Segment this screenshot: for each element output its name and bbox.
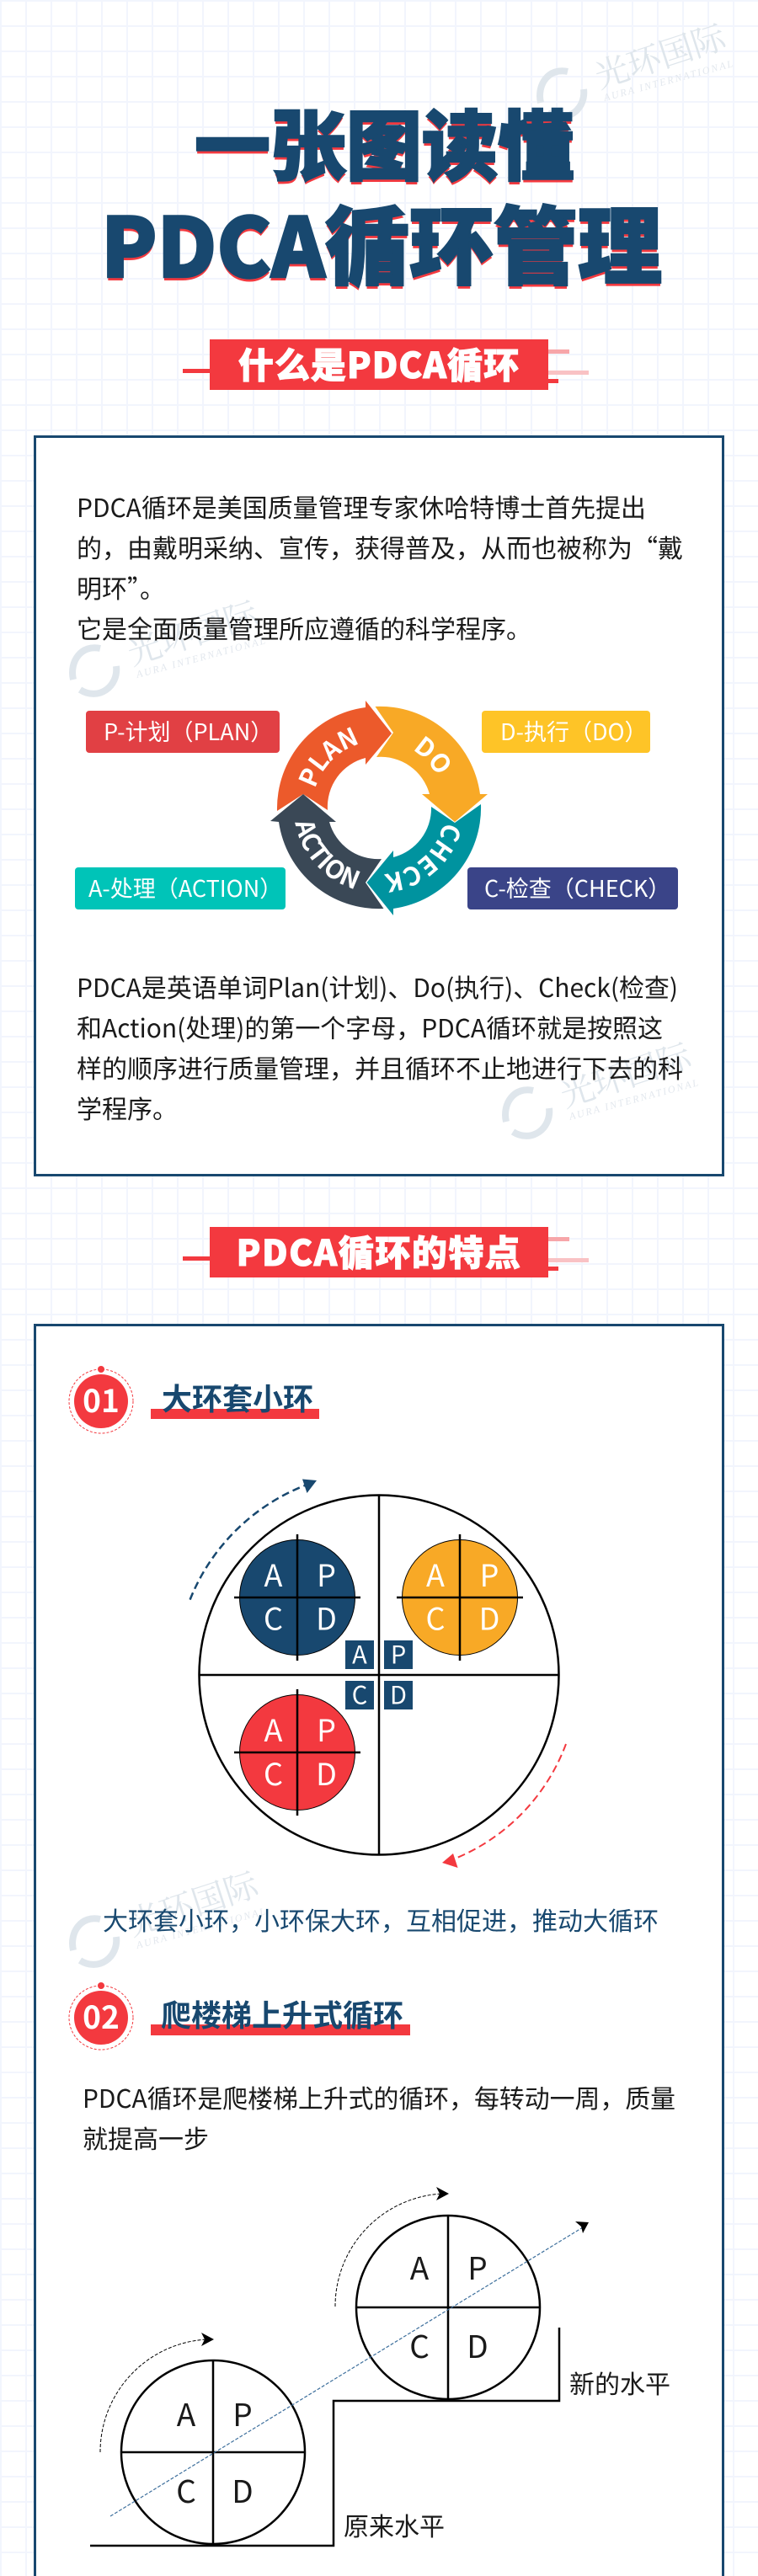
section heading: characteristics: PDCA循环的特点 <box>237 1225 521 1277</box>
section heading: what is PDCA: 什么是PDCA循环 <box>238 338 520 389</box>
watermark: panel two: 光环国际 <box>120 1858 264 1945</box>
small circle: orange: A <box>426 1552 445 1596</box>
centre squares: P <box>391 1635 406 1671</box>
rotation arrow upper <box>335 2187 449 2307</box>
watermark: top <box>536 10 734 118</box>
small circle: red: C <box>264 1751 283 1795</box>
small circle: red <box>234 1689 360 1816</box>
intro text: PDCA循环是美国质量管理专家休哈特博士首先提出 <box>77 488 646 525</box>
watermark: panel one left <box>72 587 267 694</box>
watermark: panel one right: AURA INTERNATIONAL <box>567 1076 700 1123</box>
watermark: panel one left: 光环国际 <box>120 587 264 675</box>
explanation text: 学程序。 <box>77 1089 178 1126</box>
label: check: C-检查（CHECK） <box>484 871 670 904</box>
badge 02 <box>69 1982 133 2050</box>
upper circle: D <box>467 2322 488 2367</box>
PDCA cycle ring: ACTION <box>295 822 360 889</box>
explanation text: 样的顺序进行质量管理，并且循环不止地进行下去的科 <box>77 1048 683 1085</box>
PDCA cycle ring <box>270 701 488 915</box>
badge 02: 02 <box>83 1992 120 2038</box>
watermark: top: 光环国际 <box>588 10 732 98</box>
lower circle: D <box>232 2467 254 2512</box>
intro text: 的，由戴明采纳、宣传，获得普及，从而也被称为“戴 <box>77 528 683 565</box>
label: original level: 原来水平 <box>344 2506 445 2543</box>
label: check <box>467 867 678 909</box>
caption: 大环套小环，小环保大环，互相促进，推动大循环 <box>103 1901 659 1938</box>
PDCA cycle ring: PLAN <box>298 727 358 787</box>
upper circle: P <box>467 2243 488 2289</box>
lower circle: P <box>232 2390 253 2435</box>
panel: characteristics <box>34 1324 724 2576</box>
label: new level: 新的水平 <box>569 2364 670 2401</box>
badge 01 <box>69 1366 133 1433</box>
small circle: red: P <box>317 1707 336 1751</box>
small circle: red: A <box>264 1707 283 1751</box>
label: action: A-处理（ACTION） <box>88 871 282 904</box>
subheading 02: 爬楼梯上升式循环 <box>161 1992 403 2035</box>
small circle: orange: C <box>426 1595 445 1639</box>
lower circle: C <box>176 2467 196 2512</box>
intro text: 它是全面质量管理所应遵循的科学程序。 <box>77 609 531 646</box>
small circle: navy <box>234 1534 360 1661</box>
intro text <box>77 488 683 646</box>
small circle: orange <box>397 1534 523 1661</box>
staircase text: PDCA循环是爬楼梯上升式的循环，每转动一周，质量 <box>83 2078 675 2115</box>
centre squares: A <box>352 1635 367 1671</box>
staircase diagram <box>90 2187 670 2546</box>
label: plan: P-计划（PLAN） <box>104 714 273 747</box>
watermark: top: AURA INTERNATIONAL <box>601 57 734 104</box>
centre squares: C <box>352 1676 367 1711</box>
upper circle <box>356 2216 540 2399</box>
subheading 01: 大环套小环 <box>162 1375 313 1419</box>
label: do <box>482 711 650 753</box>
upper circle: C <box>409 2322 430 2367</box>
watermark: panel one right <box>505 1029 700 1136</box>
staircase text: 就提高一步 <box>83 2119 209 2156</box>
small circle: navy: P <box>317 1552 336 1596</box>
title line 1: 一张图读懂 <box>195 86 574 195</box>
PDCA cycle ring: DO <box>414 736 450 772</box>
small circle: navy: C <box>264 1595 283 1639</box>
lower circle: A <box>177 2390 196 2435</box>
lower circle <box>121 2360 305 2544</box>
PDCA cycle ring: CHECK <box>384 825 460 893</box>
arrow: red dashed <box>442 1744 566 1868</box>
intro text: 明环”。 <box>77 568 165 605</box>
small circle: orange: P <box>480 1552 499 1596</box>
explanation text <box>77 968 683 1126</box>
badge 01: 01 <box>83 1376 120 1421</box>
rotation arrow lower <box>100 2333 214 2452</box>
big circle diagram <box>199 1495 559 1854</box>
upper circle: A <box>410 2243 430 2289</box>
small circle: navy: D <box>316 1595 337 1639</box>
label: plan <box>86 711 280 753</box>
rising dashed arrow <box>110 2221 589 2516</box>
staircase text <box>83 2078 675 2156</box>
arrow: navy dashed <box>190 1479 317 1600</box>
watermark: panel two <box>72 1858 267 1965</box>
centre squares: D <box>390 1676 407 1711</box>
watermark: panel one right: 光环国际 <box>553 1029 697 1117</box>
watermark: panel two: AURA INTERNATIONAL <box>134 1905 267 1951</box>
small circle: orange: D <box>479 1595 499 1639</box>
title line 2: PDCA循环管理 <box>101 179 662 301</box>
small circle: red: D <box>316 1751 337 1795</box>
explanation text: 和Action(处理)的第一个字母，PDCA循环就是按照这 <box>77 1008 663 1045</box>
watermark: panel one left: AURA INTERNATIONAL <box>134 634 267 680</box>
section heading: characteristics <box>183 1225 589 1277</box>
section heading: what is PDCA <box>183 338 589 390</box>
centre squares <box>345 1635 413 1711</box>
label: do: D-执行（DO） <box>500 714 648 747</box>
panel: what is PDCA <box>34 435 724 1176</box>
explanation text: PDCA是英语单词Plan(计划)、Do(执行)、Check(检查) <box>77 968 678 1005</box>
small circle: navy: A <box>264 1552 283 1596</box>
